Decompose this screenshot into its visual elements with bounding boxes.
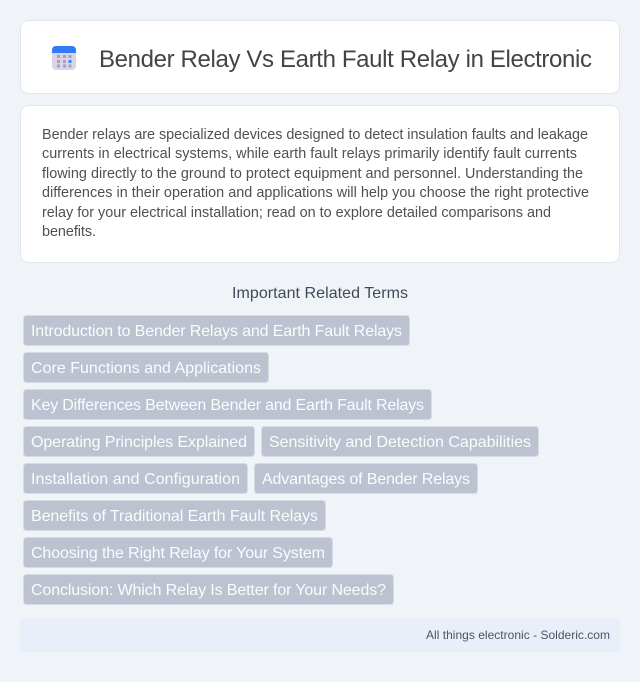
footer [20,618,620,652]
text block: intro paragraph: flowing directly to the ground to protect equipment and personnel. Understanding the [42,166,583,182]
tag: installation [24,464,248,494]
text block: intro paragraph: benefits. [42,224,96,240]
tag: operating principles: Operating Principles Explained [31,434,247,451]
footer: All things electronic - Solderic.com [426,628,610,642]
tag: sensitivity [262,426,538,456]
tag: key differences: Key Differences Between Bender and Earth Fault Relays [31,397,424,414]
panel: header [20,20,620,94]
tag: introduction [24,316,410,346]
tag: introduction: Introduction to Bender Relays and Earth Fault Relays [31,323,402,340]
tag: advantages [254,464,478,494]
heading: related terms: Important Related Terms [232,285,408,302]
tag: advantages: Advantages of Bender Relays [262,471,470,488]
text block: intro paragraph [42,127,589,240]
tag: operating principles [24,426,254,456]
tag: key differences [24,390,432,420]
icon: calendar [52,46,76,70]
tag: choosing: Choosing the Right Relay for Your System [31,545,325,562]
tag: conclusion: Conclusion: Which Relay Is Better for Your Needs? [31,582,386,599]
panel: introduction [20,106,620,262]
text block: intro paragraph: differences in their operation and applications will help you choose the right protective [42,185,589,201]
text block: intro paragraph: currents in electrical systems, while earth fault relays primarily identify fault currents [42,146,577,162]
tag: benefits: Benefits of Traditional Earth Fault Relays [31,508,318,525]
text block: intro paragraph: Bender relays are specialized devices designed to detect insulation faults and leakage [42,127,588,143]
tag: conclusion [24,574,394,604]
tag: benefits [24,500,326,530]
tag: core functions [24,352,268,382]
tag: core functions: Core Functions and Applications [31,360,261,377]
tag: choosing [24,538,332,568]
panel: term tags [24,316,538,604]
tag: sensitivity: Sensitivity and Detection Capabilities [269,434,531,451]
text block: intro paragraph: relay for your electrical installation; read on to explore detailed comparisons and [42,205,551,221]
tag: installation: Installation and Configuration [31,471,240,488]
title: Bender Relay Vs Earth Fault Relay in Electronic [99,46,592,73]
